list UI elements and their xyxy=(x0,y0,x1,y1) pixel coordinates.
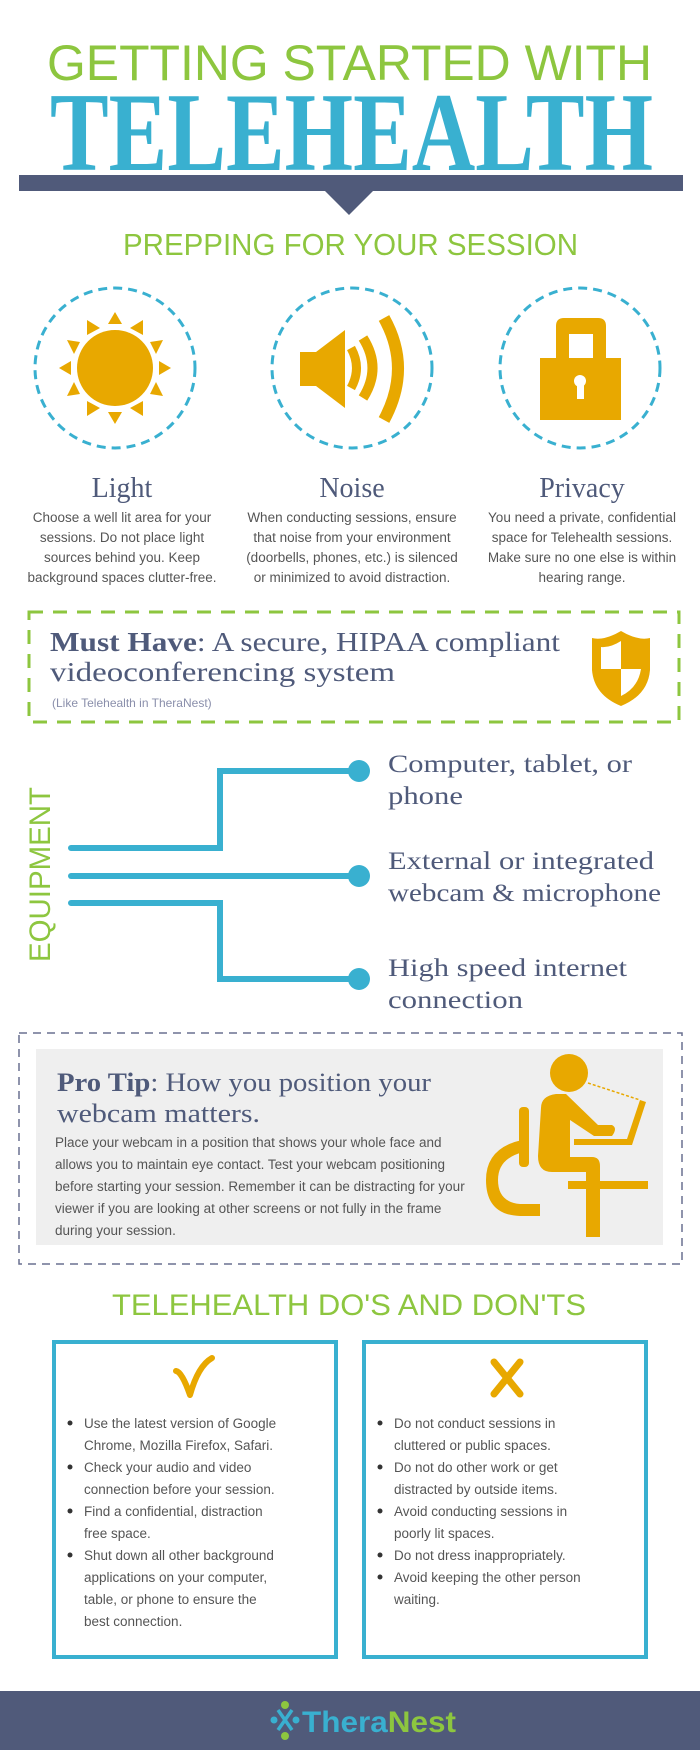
text: light xyxy=(27,510,217,585)
panel: do's xyxy=(54,1342,336,1657)
icon: lock xyxy=(500,288,660,448)
panel: light xyxy=(27,288,217,585)
diagram: equipment branches xyxy=(71,760,370,990)
heading: light: Light xyxy=(92,473,153,504)
text: equipment items: External or integrated xyxy=(388,848,655,875)
list: don'ts: poorly lit spaces. xyxy=(394,1526,495,1541)
logo: theranest: TheraNest xyxy=(302,1706,456,1739)
text: noise: or minimized to avoid distraction. xyxy=(254,570,450,585)
text: noise: that noise from your environment xyxy=(253,530,451,545)
list: don'ts: Do not dress inappropriately. xyxy=(394,1548,566,1563)
icon: x xyxy=(494,1362,520,1394)
text: privacy: Make sure no one else is within xyxy=(488,550,676,565)
text: pro tip: allows you to maintain eye contact. Test your webcam positioning xyxy=(55,1157,445,1172)
icon: person at laptop xyxy=(486,1054,648,1237)
text: equipment items: Computer, tablet, or xyxy=(388,751,633,778)
text: noise: (doorbells, phones, etc.) is silenced xyxy=(246,550,458,565)
list: do's: Find a confidential, distraction xyxy=(84,1504,263,1519)
heading: equipment: EQUIPMENT xyxy=(24,787,57,962)
text: pro tip: viewer if you are looking at other screens or not fully in the frame xyxy=(55,1201,441,1216)
heading: noise: Noise xyxy=(319,473,385,504)
text: pro tip: before starting your session. Remember it can be distracting for your xyxy=(55,1179,465,1194)
text: pro tip xyxy=(55,1135,465,1238)
list: don'ts: Avoid keeping the other person xyxy=(394,1570,581,1585)
text: equipment items: connection xyxy=(388,987,524,1014)
text: privacy xyxy=(488,510,676,585)
list: do's: Check your audio and video xyxy=(84,1460,251,1475)
text: must have xyxy=(50,627,561,710)
list: do's: Shut down all other background xyxy=(84,1548,274,1563)
text: noise: When conducting sessions, ensure xyxy=(247,510,457,525)
text: equipment items xyxy=(388,751,661,1014)
text: pro tip: during your session. xyxy=(55,1223,176,1238)
panel: don'ts xyxy=(364,1342,646,1657)
text: must have: videoconferencing system xyxy=(50,657,395,687)
list: don'ts xyxy=(378,1416,581,1607)
footer xyxy=(0,1691,700,1750)
icon: speaker xyxy=(272,288,432,448)
panel: pro tip xyxy=(19,1033,682,1264)
text: noise xyxy=(246,510,458,585)
panel: privacy xyxy=(488,288,676,585)
title line 1: GETTING STARTED WITH xyxy=(47,35,652,91)
text: must have: (Like Telehealth in TheraNest) xyxy=(52,696,212,710)
text: privacy: space for Telehealth sessions. xyxy=(492,530,672,545)
panel: noise xyxy=(246,288,458,585)
icon: check xyxy=(176,1358,212,1395)
text: light: sources behind you. Keep xyxy=(44,550,200,565)
list: do's xyxy=(68,1416,276,1629)
list: don'ts: Do not do other work or get xyxy=(394,1460,558,1475)
heading: pro tip: Pro Tip : How you position your xyxy=(57,1068,431,1097)
list: do's: table, or phone to ensure the xyxy=(84,1592,257,1607)
list: do's: connection before your session. xyxy=(84,1482,275,1497)
icon: sun xyxy=(35,288,195,448)
text: pro tip: Place your webcam in a position that shows your whole face and xyxy=(55,1135,441,1150)
text: light: sessions. Do not place light xyxy=(40,530,204,545)
heading: pro tip: webcam matters. xyxy=(57,1099,260,1128)
logo: theranest xyxy=(270,1701,456,1740)
icon: shield xyxy=(592,631,650,706)
text: must have: Must Have : A secure, HIPAA compliant xyxy=(50,627,561,657)
list: don'ts: Avoid conducting sessions in xyxy=(394,1504,567,1519)
text: privacy: You need a private, confidential xyxy=(488,510,676,525)
text: equipment items: High speed internet xyxy=(388,955,627,982)
text: light: Choose a well lit area for your xyxy=(33,510,212,525)
list: don'ts: waiting. xyxy=(393,1592,440,1607)
list: do's: best connection. xyxy=(84,1614,182,1629)
list: don'ts: Do not conduct sessions in xyxy=(394,1416,555,1431)
text: light: background spaces clutter-free. xyxy=(27,570,217,585)
list: don'ts: distracted by outside items. xyxy=(394,1482,558,1497)
list: do's: applications on your computer, xyxy=(84,1570,267,1585)
text: privacy: hearing range. xyxy=(538,570,626,585)
heading: prepping: PREPPING FOR YOUR SESSION xyxy=(123,227,578,262)
list: do's: free space. xyxy=(84,1526,151,1541)
callout: must have xyxy=(29,612,679,722)
list: don'ts: cluttered or public spaces. xyxy=(394,1438,551,1453)
list: do's: Chrome, Mozilla Firefox, Safari. xyxy=(84,1438,273,1453)
heading: privacy: Privacy xyxy=(539,473,625,504)
title bar with pointer xyxy=(19,175,683,215)
text: equipment items: phone xyxy=(388,783,463,810)
text: equipment items: webcam & microphone xyxy=(388,880,661,907)
list: do's: Use the latest version of Google xyxy=(84,1416,276,1431)
heading: do's and don'ts: TELEHEALTH DO'S AND DON'TS xyxy=(112,1289,586,1322)
heading: pro tip xyxy=(57,1068,431,1128)
